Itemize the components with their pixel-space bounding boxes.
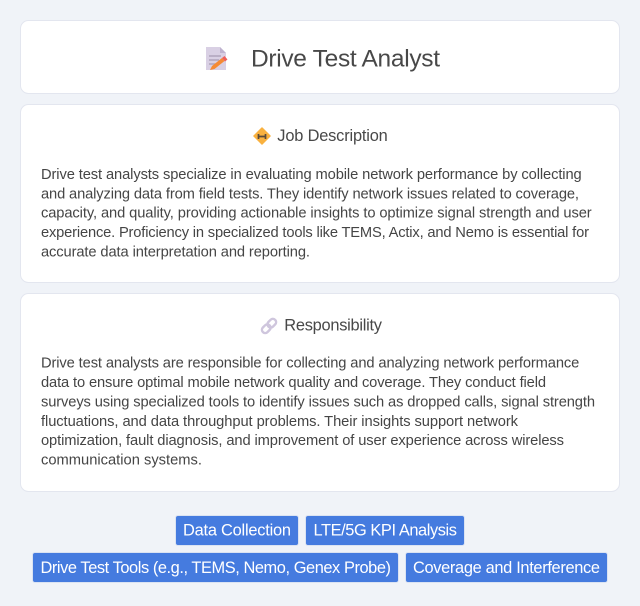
text block: responsibility: optimization, fault diagnosis, and improvement of user experience across wireless [41, 433, 564, 449]
panel: title [20, 20, 620, 94]
text block: job description [41, 167, 592, 260]
panel: job description [20, 104, 620, 282]
tag: drive test tools: Drive Test Tools (e.g., TEMS, Nemo, Genex Probe) [40, 559, 391, 577]
tag: LTE/5G KPI analysis: LTE/5G KPI Analysis [314, 522, 457, 540]
heading: job description: Job Description [277, 127, 388, 145]
text block: responsibility: fluctuations, and data throughput problems. Their insights support network [41, 414, 519, 430]
tag: drive test tools [32, 552, 398, 582]
title text: Drive Test Analyst [251, 46, 440, 73]
text block: job description: capacity, and quality, providing actionable insights to optimize signal strength and user [41, 206, 592, 222]
panel: responsibility [20, 294, 620, 492]
tag: LTE/5G KPI analysis [306, 516, 464, 546]
text block: job description: and analyzing data from field tests. They identify network issues related to coverage, [41, 186, 579, 202]
icon: memo with pencil [206, 47, 228, 70]
icon: construction diamond [254, 128, 270, 144]
text block: responsibility: surveys using specialized tools to identify issues such as dropped calls, signal strength [41, 394, 595, 410]
skill tags [32, 516, 608, 582]
heading: responsibility: Responsibility [284, 317, 383, 335]
tag: coverage and interference: Coverage and Interference [413, 559, 600, 577]
text block: responsibility: Drive test analysts are responsible for collecting and analyzing network performance [41, 356, 579, 372]
text block: job description: experience. Proficiency in specialized tools like TEMS, Actix, and Nemo is essential for [41, 225, 589, 241]
tag: coverage and interference [406, 552, 608, 582]
text block: responsibility: data to ensure optimal mobile network quality and coverage. They conduct field [41, 375, 546, 391]
text block: responsibility [41, 356, 595, 468]
text block: job description: accurate data interpretation and reporting. [41, 244, 310, 260]
tag: data collection [176, 516, 298, 546]
tag: data collection: Data Collection [183, 522, 291, 540]
text block: job description: Drive test analysts specialize in evaluating mobile network performance by collecting [41, 167, 582, 183]
text block: responsibility: communication systems. [41, 452, 202, 468]
icon: link [261, 318, 277, 334]
